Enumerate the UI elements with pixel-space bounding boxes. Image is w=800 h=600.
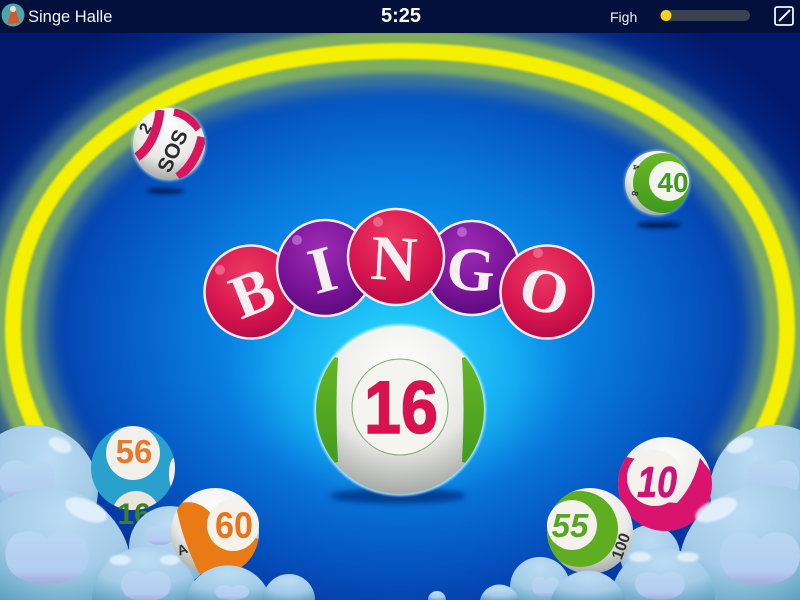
ball: 60 <box>171 488 262 580</box>
ball: 56: 56 <box>116 433 152 470</box>
ball letter G: G <box>444 234 498 306</box>
main ball: 16: 16 <box>364 366 438 449</box>
cloud behind ball 60 <box>129 506 211 588</box>
level label: Figh <box>610 9 637 25</box>
lower cloud <box>92 547 198 600</box>
central glow <box>222 240 578 504</box>
ball: 55: 100 <box>609 531 634 562</box>
ball: 10: 10 <box>637 458 677 507</box>
hall name: Singe Halle <box>28 8 112 26</box>
floating ball: 40: 4 <box>630 163 641 171</box>
floating ball: SOS <box>132 106 206 194</box>
ball letter B: B <box>221 254 284 333</box>
ball letter N <box>348 209 444 305</box>
bottom cloud <box>185 565 271 600</box>
right cloud bubbles <box>428 425 800 600</box>
ball: 56 <box>91 426 175 524</box>
ball letter I: I <box>301 232 344 309</box>
lower cloud <box>611 548 715 600</box>
floating ball: 40 <box>624 150 693 228</box>
floating ball: 40: 40 <box>657 167 689 198</box>
ball: 56: 16 <box>117 498 151 531</box>
ball: 60: A <box>175 540 190 559</box>
big front cloud <box>0 488 132 600</box>
ball letter O: O <box>512 253 576 331</box>
small cloud <box>263 574 315 600</box>
BINGO title <box>204 209 594 338</box>
top bar <box>0 0 800 33</box>
floating ball: SOS: SOS <box>153 126 193 176</box>
timer: 5:25 <box>381 5 421 27</box>
back cloud <box>0 425 98 555</box>
ball letter O <box>500 246 594 338</box>
progress bar <box>660 10 750 21</box>
tiny cloud <box>480 584 519 600</box>
tiny bubble <box>428 591 446 600</box>
ball letter I <box>277 220 373 316</box>
ball: 10 <box>618 437 712 531</box>
big front cloud <box>678 485 800 600</box>
ball: 55 <box>542 488 634 574</box>
floating ball: SOS: 2 <box>137 121 156 137</box>
floating ball: 40: 8 <box>630 190 640 197</box>
small cloud <box>510 557 570 600</box>
small back cloud <box>620 525 680 585</box>
bottom cloud <box>551 571 625 600</box>
ball: 60: 60 <box>215 505 253 546</box>
left cloud bubbles <box>0 425 315 600</box>
ball: 55: 55 <box>552 507 589 544</box>
ball letter G <box>425 221 519 315</box>
avatar icon <box>2 4 24 26</box>
ball letter B <box>204 246 298 338</box>
fullscreen icon <box>775 7 793 25</box>
main ball: 16 <box>312 322 488 508</box>
ball letter N: N <box>369 222 419 295</box>
back cloud <box>710 425 800 555</box>
neon ring <box>13 51 787 470</box>
